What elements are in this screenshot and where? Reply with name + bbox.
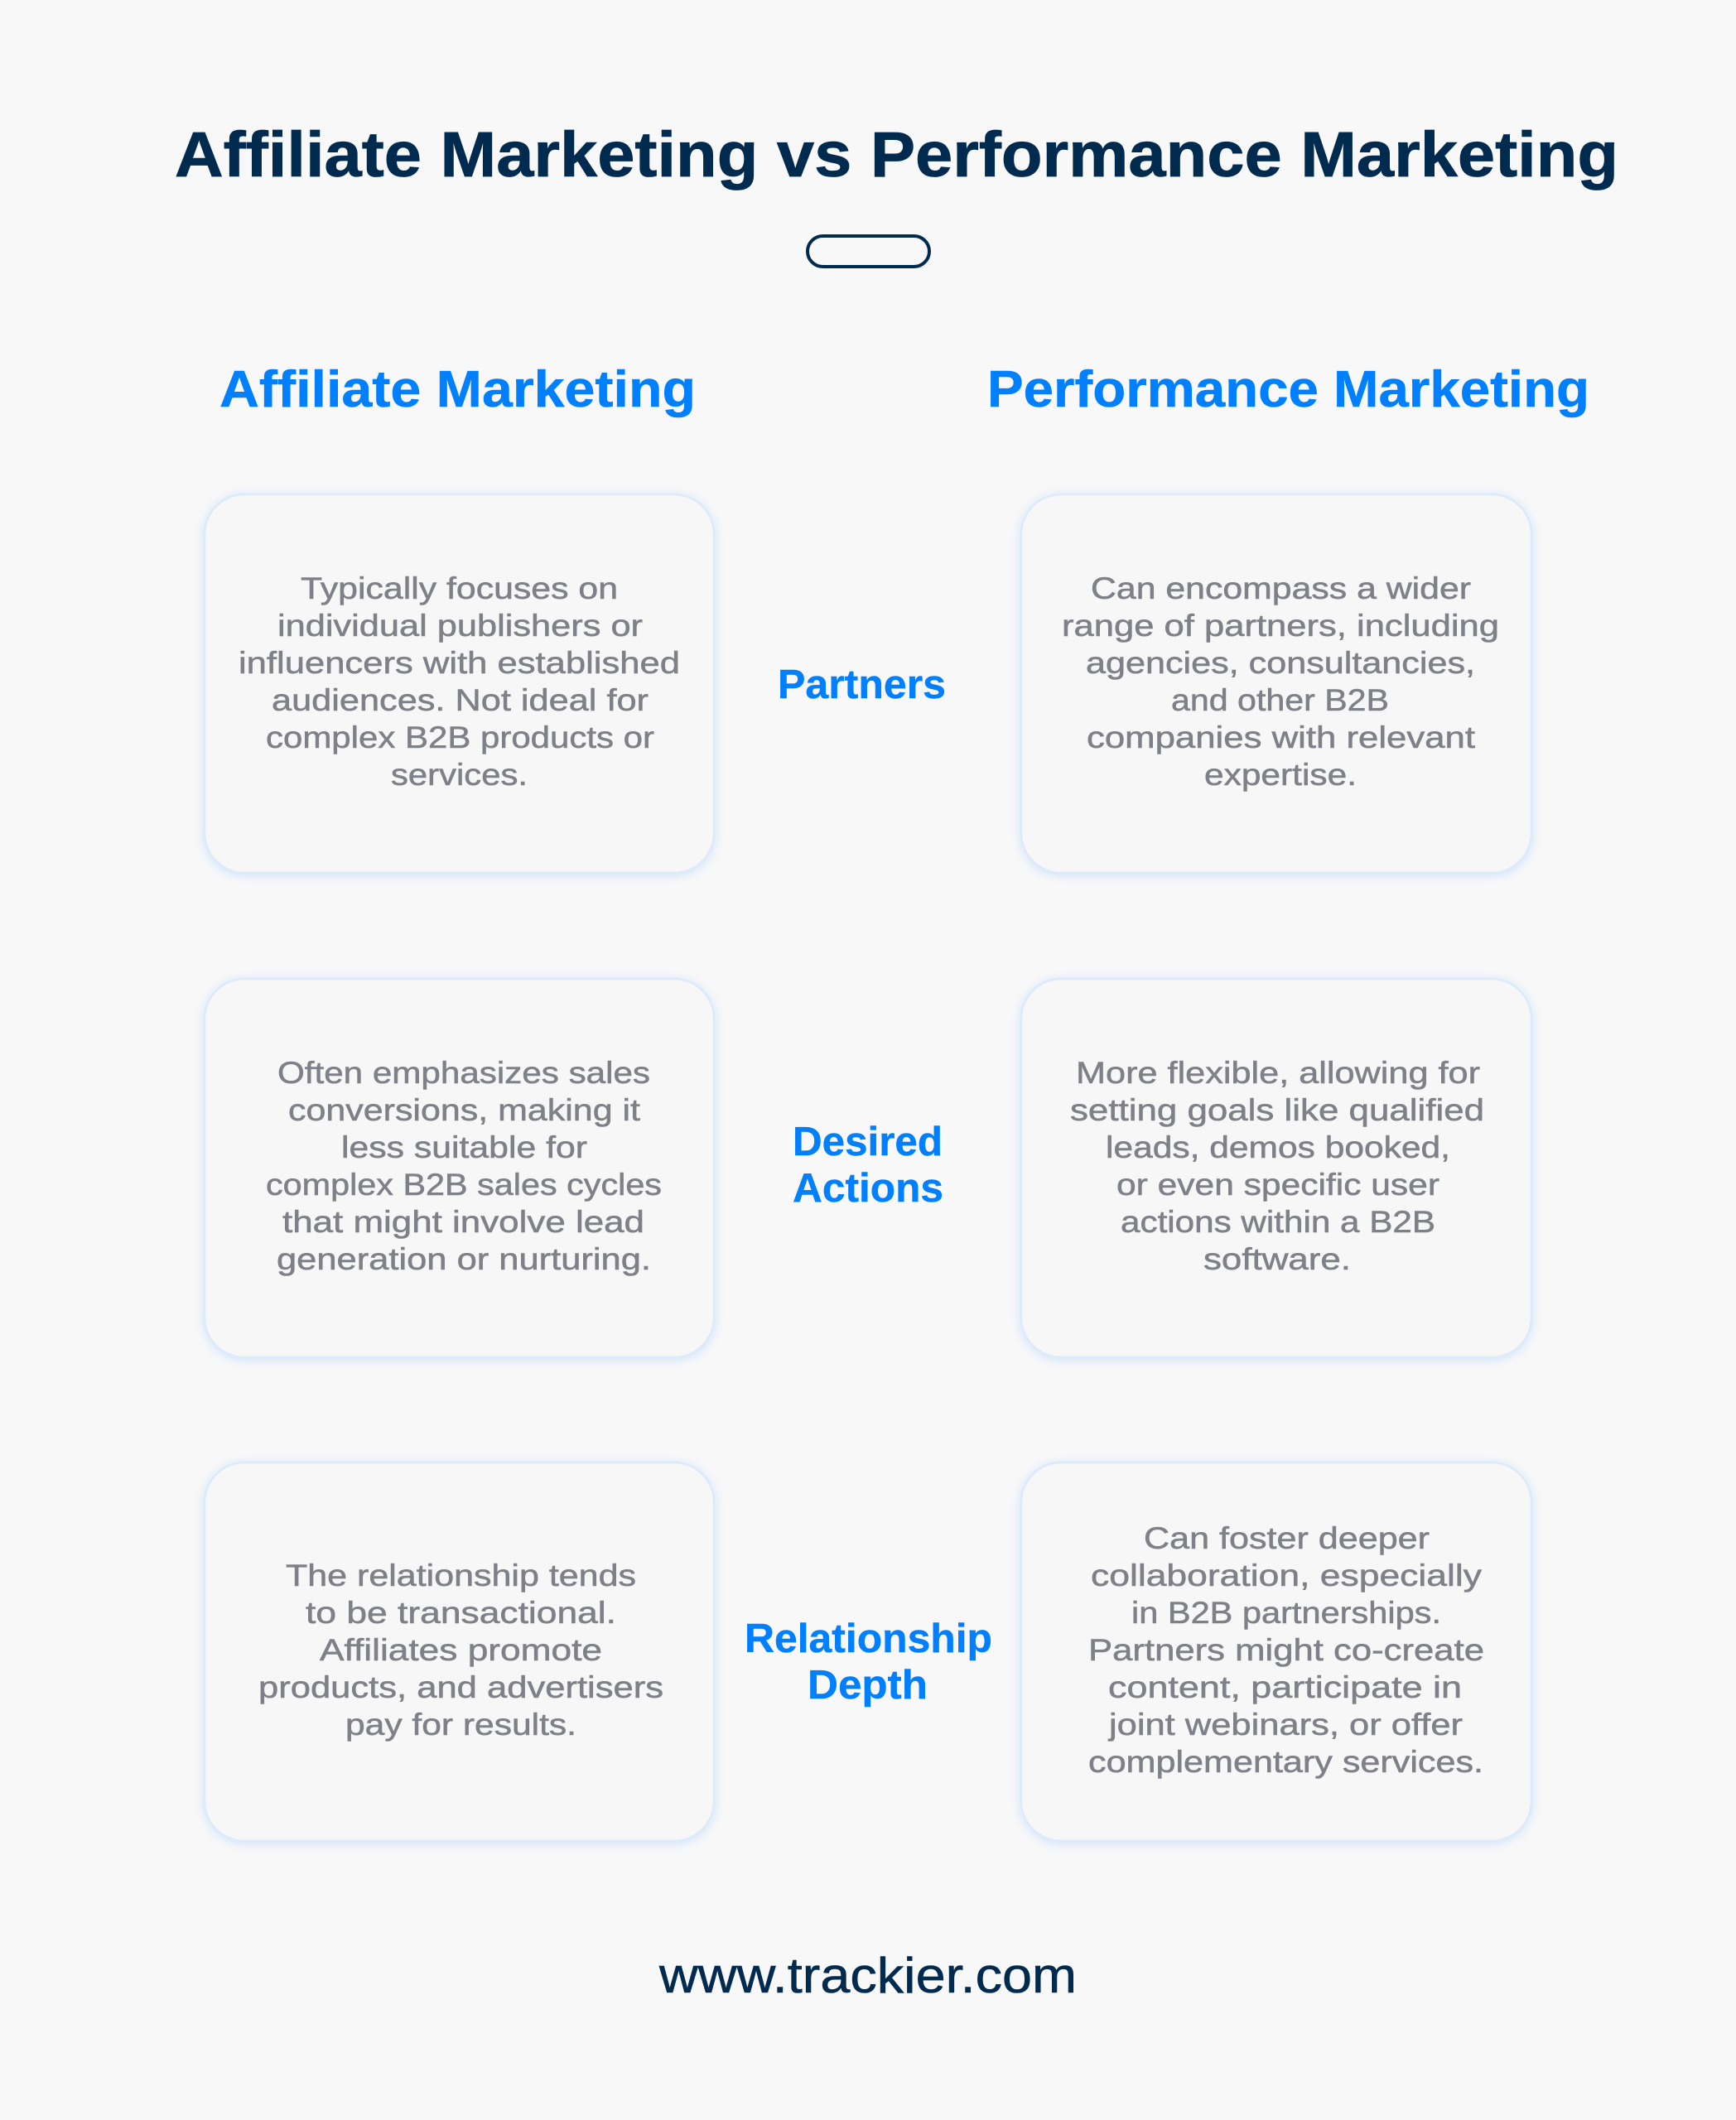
- text block: less suitable for: [341, 1130, 587, 1164]
- text block: collaboration, especially: [1091, 1559, 1483, 1592]
- text block: or even specific user: [1116, 1168, 1439, 1202]
- text block: products, and advertisers: [258, 1670, 663, 1704]
- text block: Affiliates promote: [320, 1633, 602, 1667]
- title: Affiliate Marketing vs Performance Marketing: [175, 119, 1618, 190]
- text block: complex B2B sales cycles: [266, 1168, 662, 1202]
- text block: More flexible, allowing for: [1076, 1056, 1480, 1090]
- text block: agencies, consultancies,: [1086, 646, 1475, 680]
- text block: [258, 1559, 663, 1742]
- text block: Can foster deeper: [1144, 1521, 1430, 1555]
- text block: leads, demos booked,: [1106, 1130, 1450, 1164]
- text block: and other B2B: [1171, 683, 1389, 717]
- text block: conversions, making it: [288, 1093, 641, 1127]
- panel: affiliate desired actions: [205, 979, 714, 1357]
- row label: Desired Actions: Actions: [793, 1166, 943, 1211]
- panel: performance relationship depth: [1021, 1462, 1531, 1841]
- row label: Relationship Depth: Depth: [808, 1663, 928, 1708]
- text block: range of partners, including: [1062, 609, 1499, 643]
- row label: Relationship Depth: Relationship: [745, 1616, 992, 1661]
- text block: content, participate in: [1108, 1670, 1462, 1704]
- card background: [205, 979, 714, 1357]
- card background: [1021, 1462, 1531, 1841]
- text block: that might involve lead: [282, 1205, 644, 1239]
- text block: Partners might co-create: [1088, 1633, 1484, 1667]
- text block: Often emphasizes sales: [277, 1056, 650, 1090]
- text block: individual publishers or: [277, 609, 643, 643]
- text block: software.: [1203, 1242, 1351, 1276]
- text block: companies with relevant: [1087, 720, 1476, 754]
- text block: Can encompass a wider: [1091, 571, 1471, 605]
- card background: [205, 1462, 714, 1841]
- panel: affiliate relationship depth: [205, 1462, 714, 1841]
- text block: The relationship tends: [286, 1559, 636, 1592]
- row label: Relationship Depth: [745, 1616, 992, 1708]
- text block: in B2B partnerships.: [1131, 1596, 1441, 1630]
- text block: audiences. Not ideal for: [272, 683, 649, 717]
- panel: affiliate partners: [205, 494, 714, 873]
- text block: complex B2B products or: [266, 720, 654, 754]
- text block: influencers with established: [239, 646, 680, 680]
- panel: performance desired actions: [1021, 979, 1531, 1357]
- text block: [1070, 1056, 1484, 1276]
- text block: setting goals like qualified: [1070, 1093, 1484, 1127]
- card background: [205, 494, 714, 873]
- card background: [1021, 979, 1531, 1357]
- text block: [239, 571, 680, 792]
- text block: [1088, 1521, 1484, 1779]
- heading: Affiliate Marketing column: Affiliate Marketing: [219, 361, 696, 418]
- text block: to be transactional.: [306, 1596, 616, 1630]
- panel: performance partners: [1021, 494, 1531, 873]
- text block: joint webinars, or offer: [1108, 1708, 1463, 1742]
- decorative pill under title: [808, 236, 929, 267]
- text block: expertise.: [1204, 758, 1357, 792]
- row label: Partners: Partners: [778, 662, 946, 707]
- card background: [1021, 494, 1531, 873]
- text block: [1062, 571, 1499, 792]
- text block: Typically focuses on: [301, 571, 618, 605]
- row label: Desired Actions: Desired: [793, 1120, 943, 1164]
- text block: complementary services.: [1088, 1745, 1483, 1779]
- text block: generation or nurturing.: [277, 1242, 651, 1276]
- text block: pay for results.: [345, 1708, 576, 1742]
- row label: Desired Actions: [793, 1120, 943, 1211]
- text block: [266, 1056, 662, 1276]
- footer website: www.trackier.com: [658, 1948, 1077, 2003]
- text block: services.: [391, 758, 528, 792]
- text block: actions within a B2B: [1121, 1205, 1435, 1239]
- heading: Performance Marketing column: Performance Marketing: [987, 361, 1589, 418]
